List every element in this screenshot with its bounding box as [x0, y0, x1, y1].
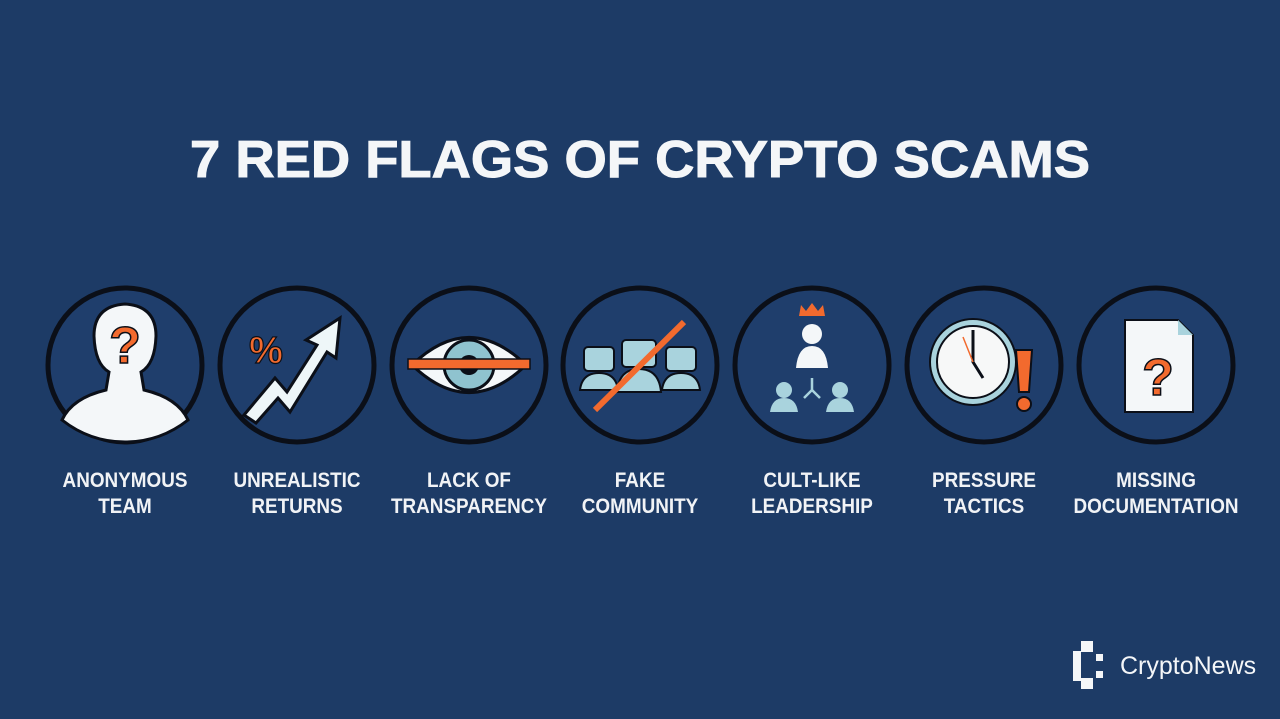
labels: [63, 469, 1239, 518]
labels: TRANSPARENCY: [391, 495, 547, 518]
icon: missing documentation: ?: [1142, 349, 1174, 407]
labels: MISSING: [1116, 469, 1196, 492]
icon: pressure tactics: [907, 288, 1061, 442]
logo: CryptoNews: CryptoNews: [1120, 652, 1256, 680]
labels: LEADERSHIP: [751, 495, 873, 518]
icon: anonymous team: [48, 288, 202, 442]
labels: LACK OF: [427, 469, 511, 492]
labels: COMMUNITY: [582, 495, 698, 518]
labels: TACTICS: [944, 495, 1024, 518]
labels: RETURNS: [251, 495, 343, 518]
labels: CULT-LIKE: [763, 469, 861, 492]
labels: ANONYMOUS: [63, 469, 187, 492]
icon: cult-like leadership: [735, 288, 889, 442]
icon: unrealistic returns: [220, 288, 374, 442]
icon: anonymous team: ?: [109, 317, 141, 375]
labels: UNREALISTIC: [234, 469, 360, 492]
icon: fake community: [563, 288, 717, 442]
title: 7 RED FLAGS OF CRYPTO SCAMS: [190, 131, 1090, 189]
logo: CryptoNews: [1073, 641, 1256, 689]
labels: FAKE: [615, 469, 665, 492]
labels: PRESSURE: [932, 469, 1036, 492]
labels: TEAM: [98, 495, 152, 518]
icon: unrealistic returns: %: [249, 330, 283, 372]
icon: missing documentation: [1079, 288, 1233, 442]
labels: DOCUMENTATION: [1073, 495, 1239, 518]
icon: lack of transparency: [392, 288, 546, 442]
